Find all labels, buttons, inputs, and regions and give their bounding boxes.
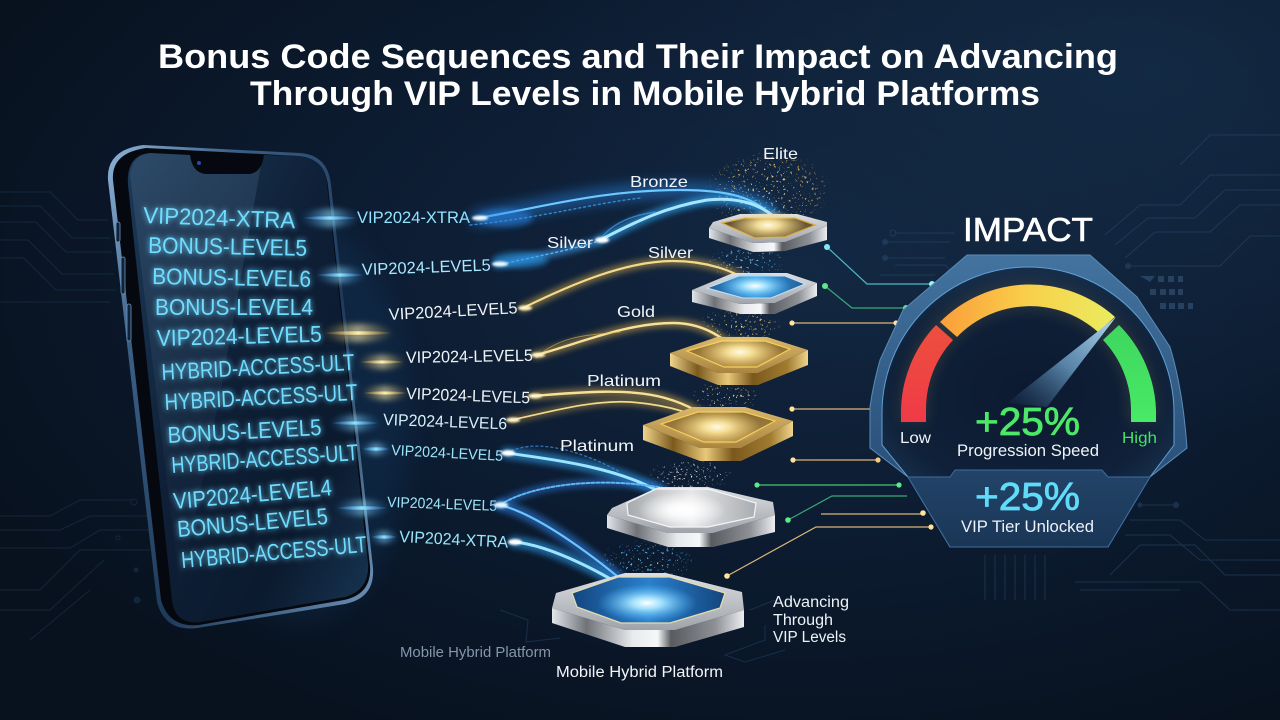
phone code list: HYBRID-ACCESS-ULT — [164, 379, 358, 415]
pixel grid decoration — [1140, 276, 1193, 309]
caption: advancing: VIP Levels — [773, 629, 846, 646]
gauge segment: orange-yellow — [940, 284, 1115, 337]
progression label: Progression Speed — [957, 442, 1099, 460]
transmitted code labels: VIP2024-LEVEL5 — [406, 347, 533, 367]
unlocked label: VIP Tier Unlocked — [961, 518, 1094, 536]
gauge label: low: Low — [900, 430, 931, 447]
title — [158, 38, 1118, 113]
tier labels: Silver — [648, 245, 694, 262]
unlocked value: +25% — [975, 476, 1080, 519]
caption: advancing: Through — [773, 612, 833, 629]
transmitted code labels: VIP2024-LEVEL5 — [391, 442, 504, 465]
transmitted code labels: VIP2024-LEVEL5 — [388, 299, 518, 324]
tier labels — [547, 146, 798, 455]
transmitted code labels: VIP2024-LEVEL6 — [383, 411, 507, 433]
phone code list: VIP2024-XTRA — [143, 202, 296, 233]
gauge needle — [1007, 317, 1116, 407]
phone code list: VIP2024-LEVEL5 — [156, 321, 322, 351]
tier labels: Elite — [763, 146, 798, 163]
caption: advancing: Advancing — [773, 594, 849, 611]
phone code list: HYBRID-ACCESS-ULT — [161, 349, 355, 385]
tier labels: Platinum — [560, 438, 634, 455]
transmitted code labels: VIP2024-LEVEL5 — [387, 494, 497, 515]
transmitted code labels — [357, 209, 533, 552]
connector lines to gauge — [727, 247, 932, 576]
gauge glow — [914, 296, 1142, 422]
caption: platform: Mobile Hybrid Platform — [556, 664, 723, 681]
gauge label: high: High — [1122, 430, 1157, 447]
side buttons — [116, 222, 131, 341]
title: Bonus Code Sequences and Their Impact on Advancing — [158, 38, 1118, 76]
platform: Mobile Hybrid base — [552, 573, 744, 647]
circuit pattern: right — [880, 135, 1280, 610]
impact gauge panel — [870, 255, 1187, 547]
tier labels: Bronze — [630, 174, 688, 191]
phone code list: BONUS-LEVEL6 — [152, 263, 311, 292]
lower panel — [908, 470, 1150, 547]
gauge inner — [882, 267, 1174, 477]
comet: gold paths to Silver and Gold platforms — [523, 261, 753, 358]
platform: Platinum silver — [607, 487, 775, 547]
phone code list: BONUS-LEVEL5 — [148, 232, 307, 261]
phone glow — [190, 220, 410, 620]
circuit pattern: left — [0, 192, 152, 640]
title: Through VIP Levels in Mobile Hybrid Platforms — [250, 75, 1040, 113]
phone code list: HYBRID-ACCESS-ULT — [171, 439, 359, 478]
caption: faint platform: Mobile Hybrid Platform — [400, 645, 551, 661]
phone code list: VIP2024-LEVEL4 — [172, 474, 333, 514]
comet: blue paths to Elite platform — [470, 190, 773, 268]
phone screen — [128, 153, 368, 622]
phone — [108, 145, 410, 628]
transmitted code labels: VIP2024-XTRA — [357, 209, 470, 227]
camera — [197, 161, 201, 165]
gauge segment: green — [1103, 325, 1156, 422]
caption: advancing — [773, 594, 849, 646]
short streaks from phone to labels — [300, 209, 409, 543]
comet: gold paths to Platinum platform — [511, 392, 717, 427]
phone code list: BONUS-LEVEL5 — [167, 414, 322, 448]
transmitted code labels: VIP2024-LEVEL5 — [406, 385, 530, 407]
phone bezel — [113, 148, 370, 625]
connector nodes — [724, 244, 935, 579]
transmitted code labels: VIP2024-LEVEL5 — [362, 257, 491, 279]
phone code list: HYBRID-ACCESS-ULT — [180, 531, 368, 573]
gauge segment: red — [901, 325, 953, 422]
progression value: +25% — [975, 401, 1080, 444]
phone code list: BONUS-LEVEL5 — [176, 503, 329, 542]
platform: Gold — [670, 335, 808, 385]
particle clusters — [593, 150, 832, 584]
phone code list: BONUS-LEVEL4 — [155, 294, 313, 320]
platform: Platinum gold — [643, 407, 793, 461]
phone body — [108, 145, 373, 628]
tier labels: Silver — [547, 235, 594, 252]
platform: Silver — [692, 273, 817, 314]
platform: Elite — [709, 210, 827, 252]
heading: IMPACT: IMPACT — [963, 211, 1093, 248]
phone code list — [143, 202, 368, 573]
hex pattern near platform — [500, 600, 785, 662]
tier labels: Gold — [617, 304, 655, 321]
tier labels: Platinum — [587, 373, 661, 390]
screen reflection — [130, 153, 261, 590]
gauge frame — [870, 255, 1187, 547]
transmitted code labels: VIP2024-XTRA — [399, 528, 509, 552]
comet tips — [472, 216, 609, 422]
comet: blue paths to lower platforms — [494, 446, 663, 602]
